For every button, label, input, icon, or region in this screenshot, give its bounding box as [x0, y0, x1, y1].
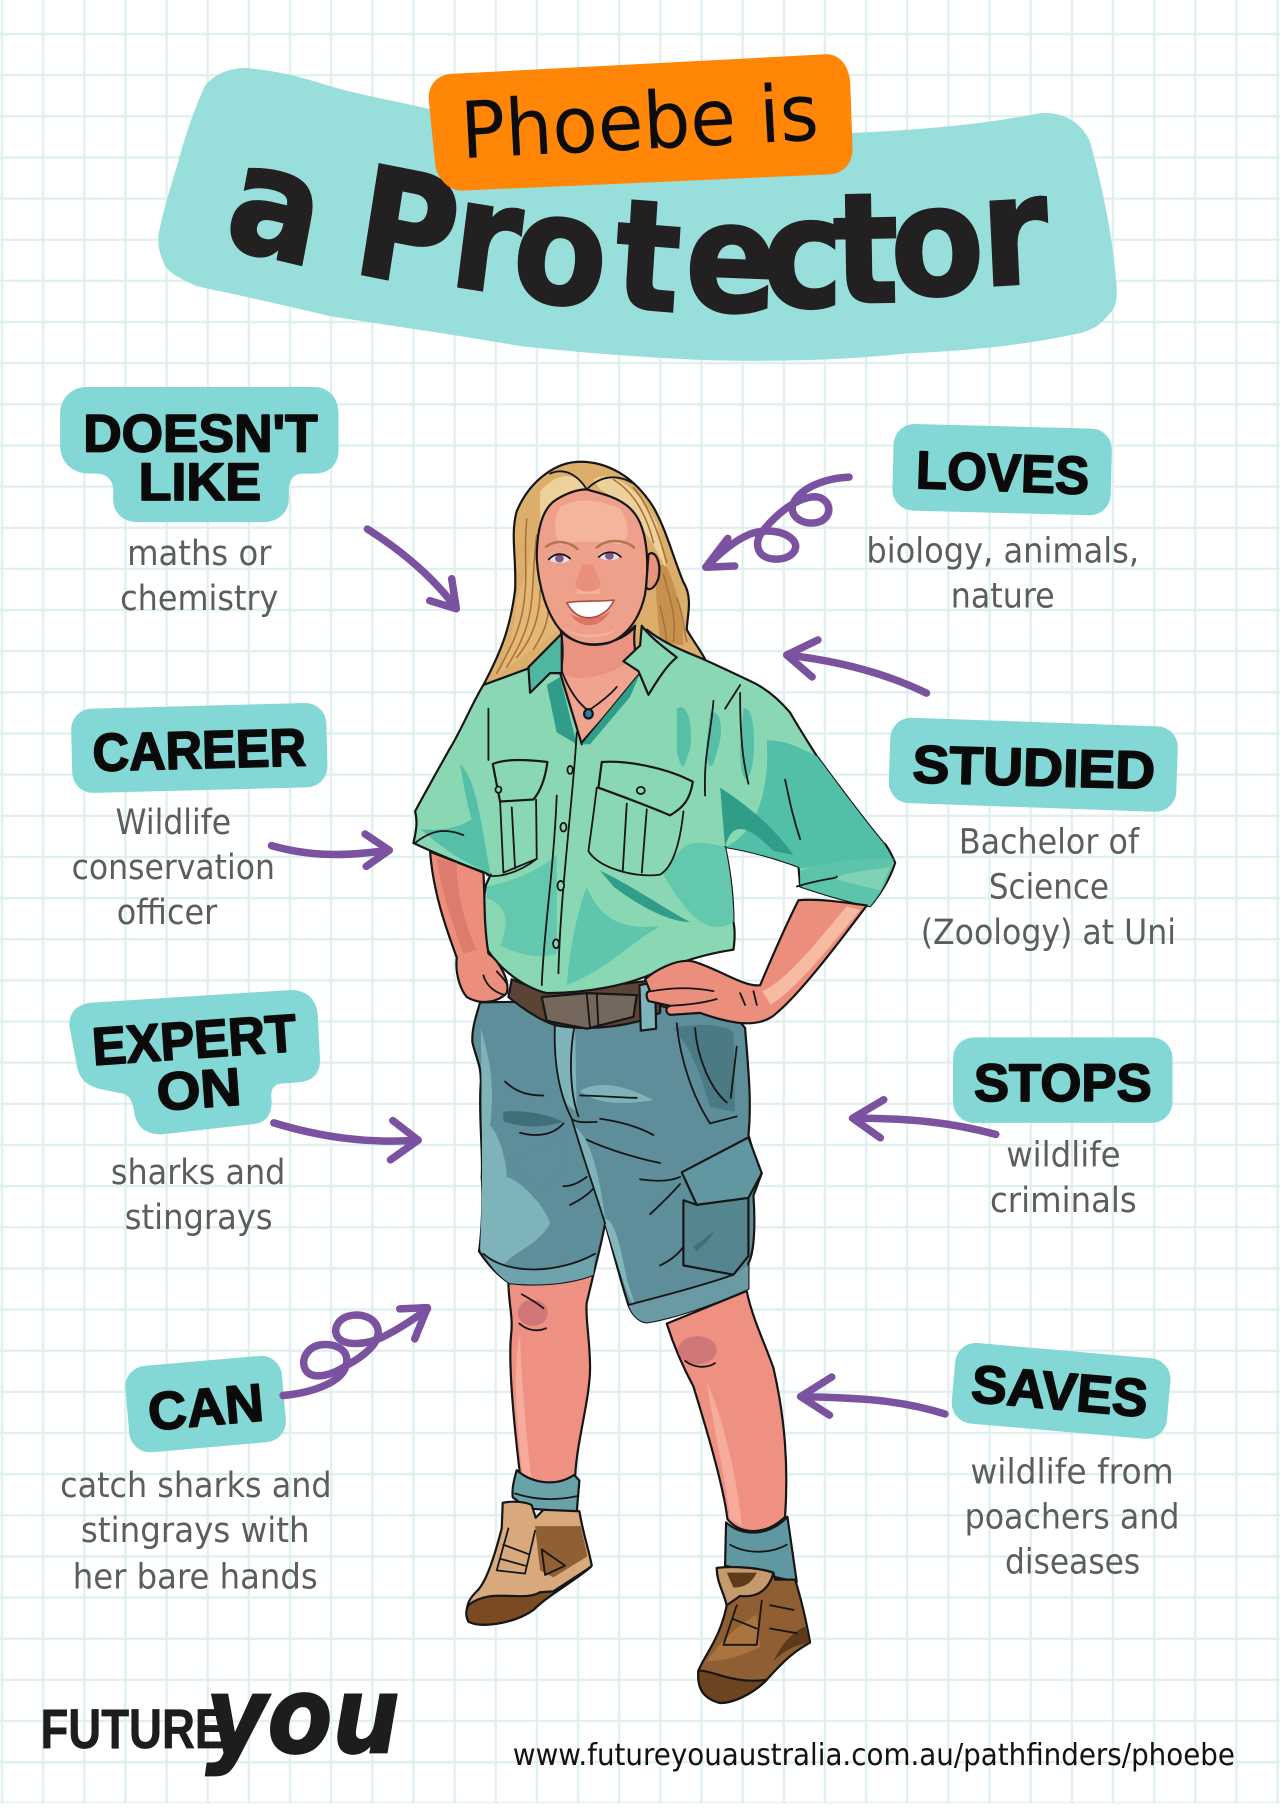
- heading: LOVES: [915, 441, 1090, 506]
- text: wildlife: [1006, 1136, 1121, 1176]
- text: catch sharks and: [60, 1466, 332, 1506]
- logo: FutureYou: [40, 1654, 400, 1778]
- heading: EXPERT: [90, 1004, 298, 1077]
- belt loop: [639, 982, 656, 1031]
- logo: you: you: [206, 1654, 400, 1778]
- necklace pendant: [584, 709, 593, 719]
- website url: www.futureyouaustralia.com.au/pathfinders/phoebe: [513, 1738, 1235, 1773]
- orange label: [429, 54, 853, 191]
- text: Bachelor of: [959, 823, 1140, 863]
- text: Wildlife: [116, 803, 231, 843]
- upper body: torso, head, arms: [413, 462, 895, 1031]
- label pill: [953, 1037, 1173, 1123]
- title: a Protector: a Protector: [215, 109, 1052, 350]
- shorts: [472, 1000, 762, 1322]
- panel: career: [71, 702, 328, 933]
- hair strands: [497, 480, 687, 673]
- belt: [508, 979, 660, 1028]
- left leg: [508, 1275, 593, 1485]
- panel: stops: criminals: [990, 1181, 1137, 1221]
- panel: saves: diseases: [1005, 1542, 1140, 1582]
- nose: [575, 564, 601, 592]
- left sock: [512, 1470, 579, 1512]
- text: biology, animals,: [866, 532, 1139, 572]
- arrow: stops: [853, 1100, 996, 1138]
- panel: doesn't like: LIKE: [139, 453, 261, 512]
- right arm and hand: [645, 900, 867, 1023]
- panel: saves: [950, 1341, 1179, 1582]
- arrow: expert on: [274, 1121, 418, 1160]
- label pill: [124, 1354, 288, 1454]
- necklace: [562, 671, 617, 711]
- right pocket: [588, 788, 683, 875]
- hair back: [483, 462, 705, 685]
- panel: loves: [866, 423, 1139, 617]
- heading: STOPS: [974, 1054, 1152, 1113]
- label pill: [69, 990, 320, 1134]
- label pill: [888, 717, 1179, 812]
- heading: DOESN'T: [83, 405, 318, 464]
- arrow: saves: [801, 1377, 945, 1415]
- heading: STUDIED: [912, 735, 1156, 801]
- left arm and hand: [430, 852, 507, 1002]
- illustration: Phoebe: [413, 462, 895, 1703]
- left boot: [467, 1502, 592, 1625]
- panel: can: [60, 1354, 332, 1597]
- collar: [528, 634, 562, 693]
- arrow: career: [271, 834, 389, 866]
- eyebrows: [546, 541, 634, 549]
- lower lip: [570, 611, 611, 625]
- title: Phoebe is: Phoebe is: [458, 67, 821, 177]
- arrow: can swirl: [283, 1308, 427, 1395]
- panel: doesn't like: chemistry: [120, 579, 278, 619]
- heading: [90, 1004, 302, 1127]
- panel: saves: poachers and: [965, 1497, 1179, 1537]
- smile: [567, 600, 614, 618]
- label pill: [950, 1341, 1172, 1441]
- arrow: loves swirl: [706, 477, 849, 567]
- arrow: doesn't like: [367, 529, 456, 609]
- panel: career: officer: [117, 893, 218, 933]
- panel: can: stingrays with: [81, 1511, 310, 1551]
- heading: CAN: [146, 1373, 266, 1442]
- panel: expert on: stingrays: [125, 1198, 273, 1238]
- panel: studied: [888, 717, 1179, 953]
- eyes: [549, 554, 570, 563]
- label pill: [71, 702, 328, 793]
- ear: [646, 553, 659, 589]
- right sock: [725, 1517, 797, 1582]
- face: [537, 489, 647, 645]
- button placket: [542, 732, 577, 985]
- right boot: [698, 1567, 810, 1703]
- panel: stops: [953, 1037, 1173, 1221]
- neck and chest: [560, 626, 643, 744]
- teal title blob: [158, 68, 1117, 361]
- panel: career: conservation: [72, 848, 275, 888]
- arrow: studied: [787, 640, 926, 693]
- panel: studied: (Zoology) at Uni: [921, 913, 1176, 953]
- panel: expert on: [69, 990, 320, 1238]
- right leg: [667, 1291, 786, 1531]
- shirt: [413, 630, 895, 993]
- heading: CAREER: [92, 718, 307, 783]
- text: maths or: [127, 534, 272, 574]
- label pill: [60, 387, 338, 522]
- lower body: legs, socks, boots, shorts: [466, 1000, 810, 1703]
- panel: loves: nature: [951, 577, 1055, 617]
- heading: ON: [155, 1058, 243, 1122]
- panel: doesn't like: [60, 387, 338, 619]
- left pocket: [493, 760, 547, 802]
- shirt fold lines: [415, 685, 837, 886]
- title banner: [158, 54, 1117, 361]
- heading: SAVES: [969, 1355, 1150, 1429]
- panel: can: her bare hands: [73, 1557, 318, 1597]
- panel: studied: Science: [989, 868, 1109, 908]
- chin line: [563, 629, 633, 644]
- logo: FUTURE: FUTURE: [40, 1698, 225, 1760]
- shirt buttons: [495, 766, 645, 948]
- shirt shading: [420, 673, 893, 985]
- label pill: [892, 423, 1112, 516]
- text: sharks and: [111, 1153, 285, 1193]
- text: wildlife from: [970, 1452, 1174, 1492]
